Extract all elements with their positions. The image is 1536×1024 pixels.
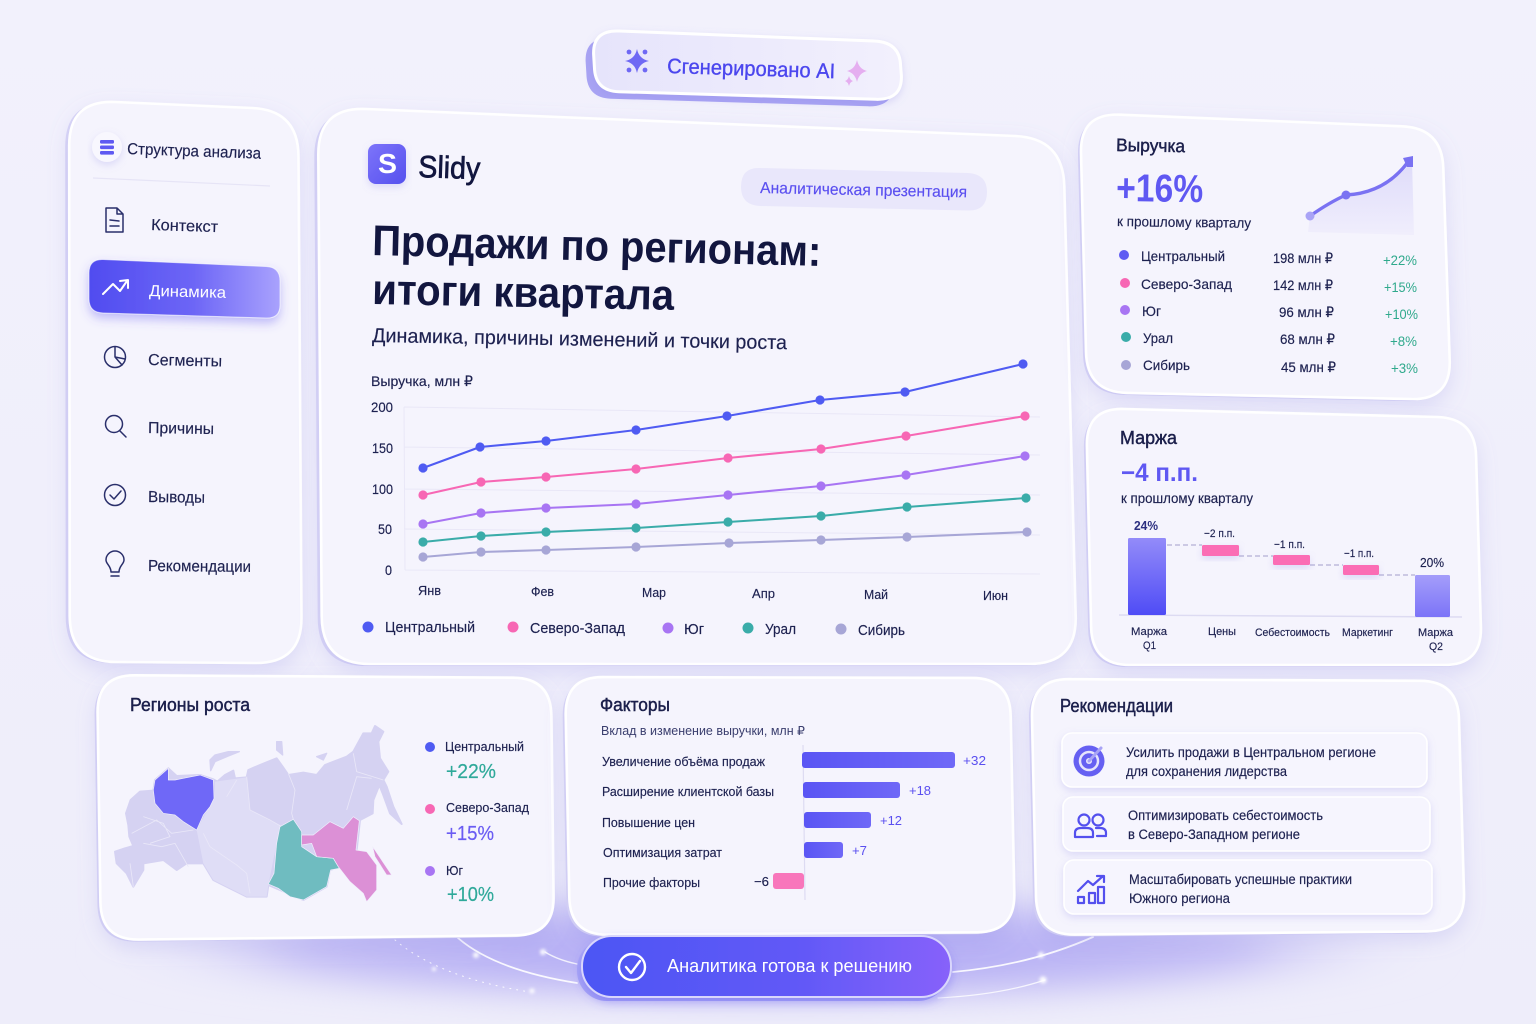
nav: Динамика active [89, 259, 280, 318]
nav: Рекомендации: Рекомендации [148, 558, 251, 576]
waterfall labels: Q2 [1429, 641, 1443, 653]
recommendation 3: Южного региона [1129, 891, 1230, 906]
bottom glow [90, 890, 1450, 1010]
row: Северо-Запад [1120, 276, 1417, 295]
row: Урал: +8% [1390, 333, 1417, 349]
chart legend: Северо-Запад [530, 620, 625, 637]
row: Юг [1120, 303, 1418, 322]
badge label: Сгенерировано AI [667, 55, 835, 83]
factors bar chart [602, 745, 986, 900]
region: teal [268, 819, 339, 900]
margin value: −4 п.п. [1121, 459, 1198, 487]
row: Юг: 96 млн ₽ [1279, 304, 1334, 320]
row: Центральный: Центральный [1141, 248, 1225, 264]
factor: затраты: Оптимизация затрат [603, 845, 722, 860]
logo: S [378, 148, 397, 179]
chart grid and y labels: 200 [371, 399, 393, 415]
panel: margin [1084, 409, 1481, 667]
factor: прочие: Прочие факторы [603, 875, 700, 890]
row: Центральный: 198 млн ₽ [1273, 250, 1333, 266]
recommendation 1: Усилить продажи в Центральном регионе [1126, 745, 1376, 760]
waterfall labels: Маркетинг [1342, 627, 1393, 639]
nav: Контекст: Контекст [151, 217, 219, 236]
row: Сибирь: Сибирь [1143, 357, 1190, 373]
badge text: Аналитика готова к решению [667, 956, 912, 976]
waterfall labels: Маржа [1418, 627, 1454, 639]
factor: клиентская база: Расширение клиентской базы [602, 784, 774, 799]
series: Урал [418, 493, 1031, 547]
row: Северо-Запад: +15% [1384, 279, 1417, 295]
row: Урал [1121, 330, 1417, 349]
row: Юг: +10% [1385, 306, 1418, 322]
panel: recommendations [1029, 679, 1464, 937]
recommendation 1: для сохранения лидерства [1126, 764, 1287, 779]
bar: Себестоимость [1273, 539, 1310, 565]
x axis labels: Фев [531, 585, 554, 599]
row: Урал: Урал [1143, 330, 1173, 346]
waterfall chart [1119, 519, 1462, 653]
bar: Маржа Q2 [1415, 556, 1450, 617]
map legend [425, 739, 529, 906]
factor: затраты: +7 [852, 843, 867, 858]
factor: прочие: −6 [754, 874, 769, 889]
factor: объём продаж: Увеличение объёма продаж [602, 754, 765, 769]
factor: объём продаж [602, 752, 986, 769]
chart legend: Юг [684, 621, 705, 638]
bar: Цены: −2 п.п. [1204, 528, 1235, 540]
factors heading: Факторы [600, 695, 670, 715]
recommendation 3 [1064, 860, 1432, 914]
chart grid and y labels: 50 [378, 521, 392, 537]
region: pink [302, 817, 392, 902]
legend: Северо-Запад: Северо-Запад [446, 800, 529, 815]
factor: клиентская база [602, 782, 931, 799]
legend: Юг: Юг [446, 863, 463, 878]
icon: pink sparkle [845, 60, 867, 86]
bar: Маржа Q2: 20% [1420, 556, 1444, 570]
waterfall labels: Маржа [1131, 626, 1168, 638]
series: Сибирь [418, 527, 1032, 562]
tag: presentation [741, 168, 987, 211]
sparkline [1306, 156, 1414, 235]
factor: цены: Повышение цен [602, 815, 695, 830]
series: Центральный [418, 359, 1028, 473]
margin heading: Маржа [1120, 428, 1178, 448]
recommendation 3: Масштабировать успешные практики [1129, 872, 1352, 887]
logo: Slidy [418, 149, 481, 186]
chart legend: Сибирь [858, 622, 905, 639]
waterfall labels: Себестоимость [1255, 627, 1330, 639]
x axis labels [418, 584, 1008, 603]
bar: Маркетинг: −1 п.п. [1344, 548, 1374, 560]
bar: Маржа Q1 [1128, 519, 1166, 615]
panel: revenue [1078, 115, 1450, 401]
factor: цены [602, 812, 902, 830]
bar: Маржа Q1: 24% [1134, 519, 1158, 533]
chart axis title: Выручка, млн ₽ [371, 373, 473, 389]
recommendation 2: в Северо-Западном регионе [1128, 827, 1300, 842]
nav: Причины [106, 416, 214, 438]
tag: presentation: Аналитическая презентация [760, 180, 967, 201]
panel: regions [95, 675, 554, 942]
icon: check [619, 954, 645, 980]
chart grid and y labels [371, 399, 1040, 578]
margin note: к прошлому кварталу [1121, 490, 1253, 506]
chart grid and y labels: 0 [385, 562, 392, 578]
chart grid and y labels: 150 [372, 440, 393, 456]
legend: Центральный: Центральный [445, 739, 524, 754]
x axis labels: Янв [418, 584, 441, 598]
top badge [586, 31, 901, 106]
x axis labels: Апр [752, 587, 775, 601]
row: Сибирь: +3% [1391, 360, 1418, 376]
legend: Юг: +10% [447, 884, 494, 906]
row: Центральный [1119, 248, 1417, 268]
row: Северо-Запад: 142 млн ₽ [1273, 277, 1333, 293]
legend: Северо-Запад: +15% [446, 823, 494, 845]
row: Центральный: +22% [1383, 252, 1417, 268]
factor: цены: +12 [880, 813, 902, 828]
title: Продажи по регионам: [372, 217, 822, 276]
nav: Причины: Причины [148, 420, 214, 438]
recommendation 1 [1062, 733, 1427, 787]
row: Сибирь [1121, 357, 1418, 376]
recommendation 2: Оптимизировать себестоимость [1128, 808, 1323, 823]
legend: Северо-Запад [425, 800, 529, 845]
chart legend: Урал [765, 621, 796, 638]
line chart [371, 359, 1040, 603]
revenue rows [1119, 248, 1418, 376]
subtitle: Динамика, причины изменений и точки роста [372, 325, 788, 354]
panel: factors [563, 677, 1014, 937]
title [372, 217, 822, 320]
waterfall labels: Цены [1208, 626, 1236, 638]
factor: клиентская база: +18 [909, 783, 931, 798]
panel: main [314, 109, 1076, 666]
chart legend [362, 619, 905, 639]
waterfall labels [1131, 626, 1454, 653]
factor: прочие [603, 873, 804, 890]
chart legend: Центральный [385, 619, 475, 636]
row: Северо-Запад: Северо-Запад [1141, 276, 1232, 292]
map: Russia [115, 726, 402, 902]
factor: объём продаж: +32 [963, 753, 986, 768]
bar: Себестоимость: −1 п.п. [1274, 539, 1305, 551]
nav: Выводы: Выводы [148, 489, 205, 507]
revenue value: +16% [1116, 167, 1203, 211]
title: итоги квартала [372, 266, 676, 320]
nav: Рекомендации [106, 551, 251, 576]
revenue note: к прошлому кварталу [1117, 213, 1251, 231]
glowing arcs [395, 937, 1093, 998]
row: Урал: 68 млн ₽ [1280, 331, 1335, 347]
chart grid and y labels: 100 [372, 481, 393, 497]
nav: Динамика active: Динамика [149, 283, 226, 302]
row: Сибирь: 45 млн ₽ [1281, 359, 1336, 375]
bottom badge [577, 936, 951, 1001]
bar: Маркетинг [1343, 548, 1379, 575]
legend: Центральный: +22% [446, 761, 496, 783]
legend: Центральный [425, 739, 524, 783]
region: blue [153, 768, 214, 830]
legend: Юг [425, 863, 494, 906]
icon: sparkle cluster [625, 49, 649, 73]
row: Юг: Юг [1142, 303, 1161, 319]
logo [368, 144, 481, 186]
sidebar heading [92, 132, 261, 163]
recommendations heading: Рекомендации [1060, 696, 1173, 716]
sidebar heading: Структура анализа [127, 141, 261, 163]
bar: Цены [1202, 528, 1239, 556]
waterfall labels: Q1 [1143, 640, 1156, 652]
nav: Сегменты [104, 346, 222, 371]
x axis labels: Май [864, 588, 888, 602]
regions heading: Регионы роста [130, 695, 251, 715]
x axis labels: Мар [642, 586, 666, 600]
nav: Выводы [104, 484, 205, 507]
nav: Сегменты: Сегменты [148, 352, 222, 371]
panel: sidebar [65, 102, 302, 664]
factor: затраты [603, 842, 867, 860]
x axis labels: Июн [983, 589, 1008, 603]
series: Северо-Запад [418, 411, 1030, 500]
revenue heading: Выручка [1116, 135, 1186, 156]
factors subheading: Вклад в изменение выручки, млн ₽ [601, 724, 805, 738]
nav: Контекст [106, 208, 219, 236]
recommendation 2 [1063, 797, 1430, 851]
series: Юг [418, 451, 1030, 529]
